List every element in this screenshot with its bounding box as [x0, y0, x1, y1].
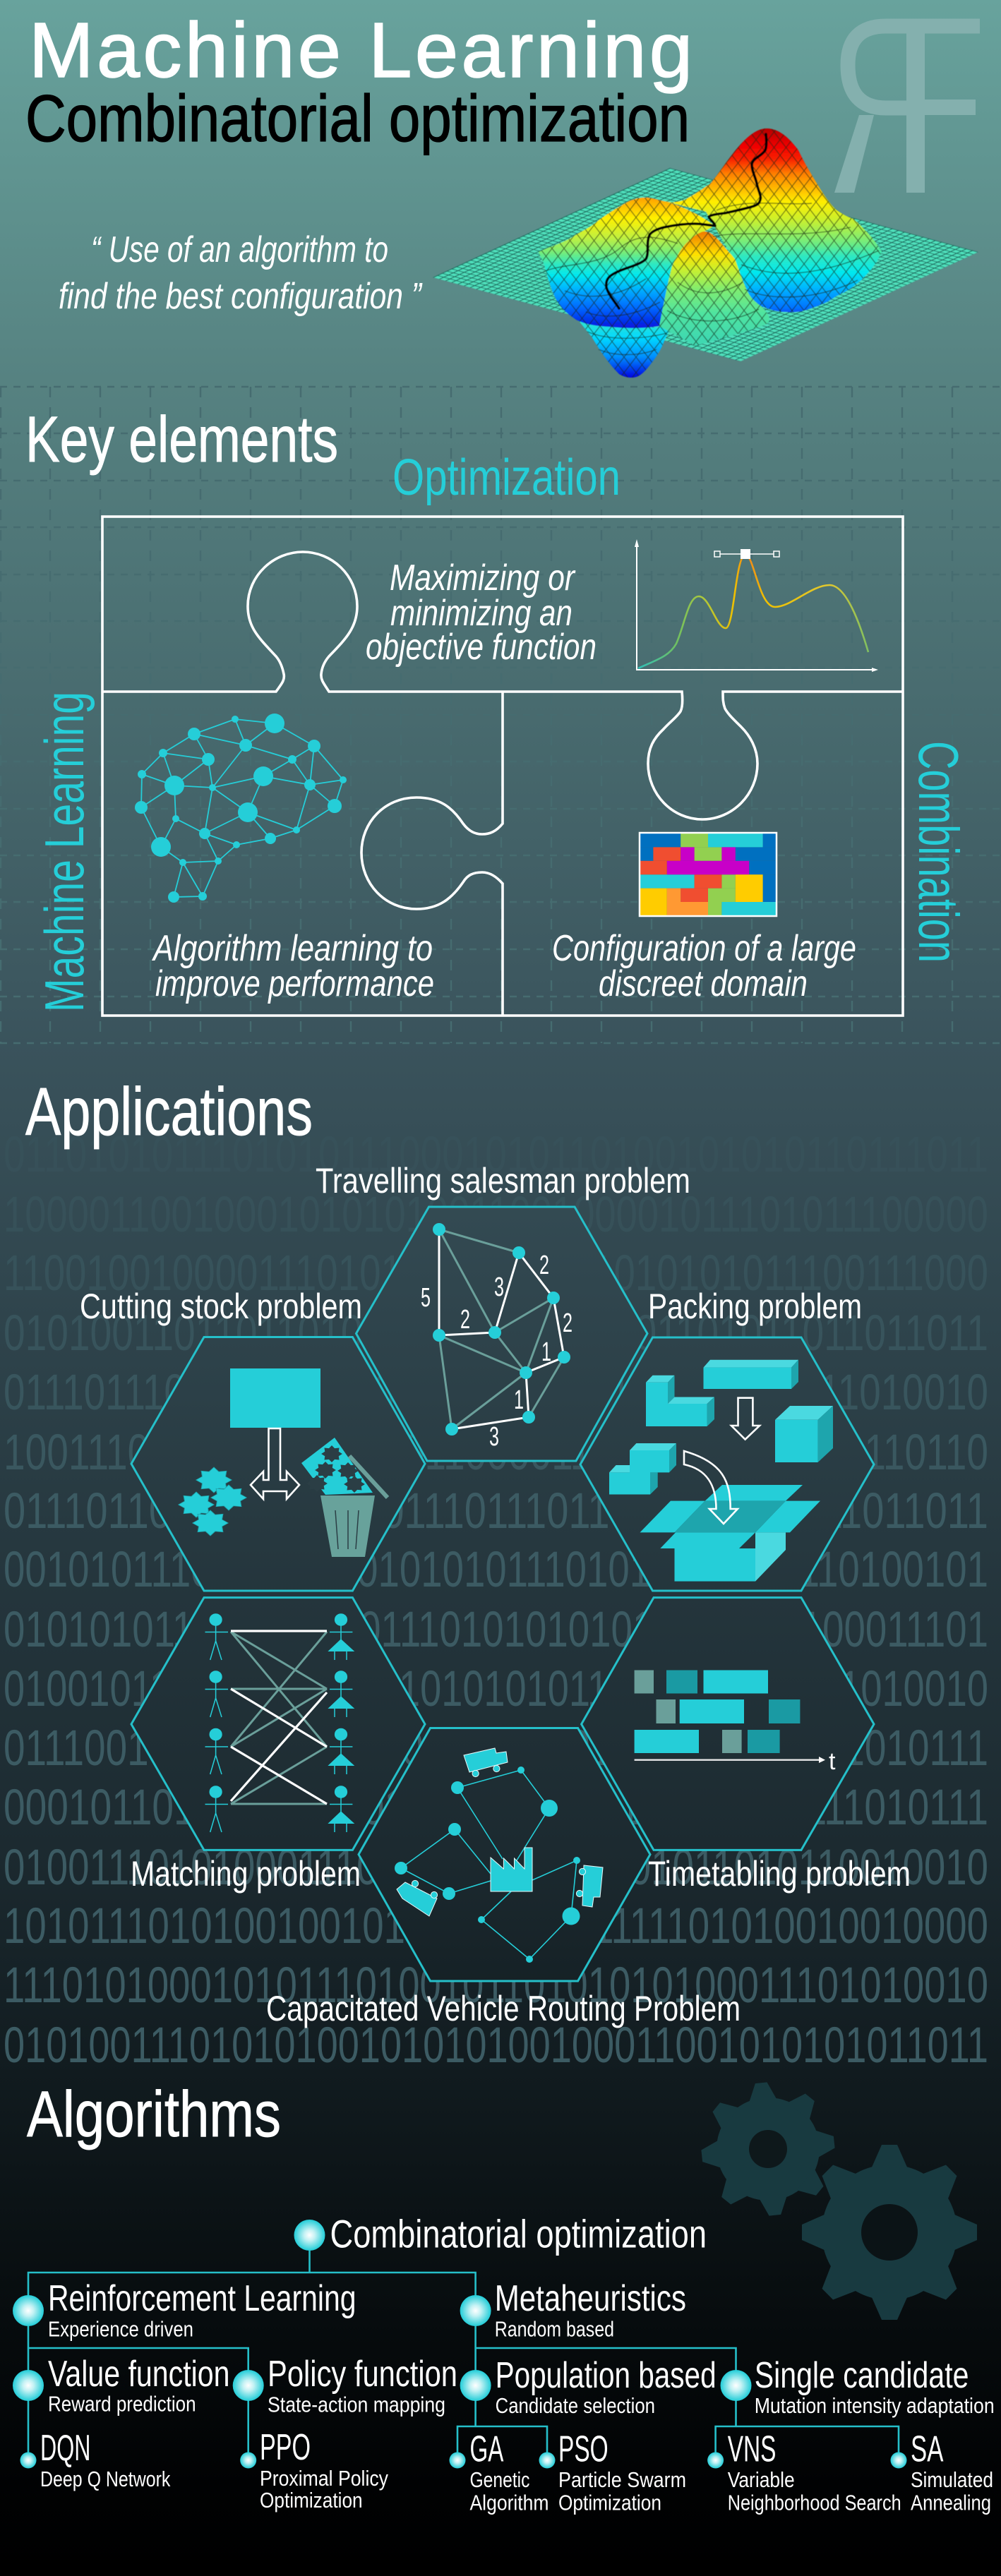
tree node: policy function: State-action mapping — [268, 2393, 445, 2417]
logo: RF monogram — [834, 26, 980, 193]
text: optimization definition — [366, 558, 597, 668]
section: applications — [25, 1074, 911, 2028]
label: optimization: Optimization — [392, 450, 621, 506]
text: combination definition — [552, 928, 856, 1004]
tree node: metaheuristics: Metaheuristics — [495, 2278, 686, 2319]
tree leaf: VNS: Variable — [728, 2467, 795, 2492]
graph: weighted tour: 3 — [489, 1422, 499, 1452]
tree leaf: VNS: Neighborhood Search — [728, 2490, 901, 2515]
tree leaf: GA — [449, 2429, 549, 2515]
label: machine learning: Machine Learning — [33, 692, 95, 1012]
tree node: single candidate — [720, 2355, 995, 2418]
icon: open box — [640, 1485, 820, 1582]
tree node: policy function — [233, 2354, 457, 2417]
panel: cutting stock problem — [131, 1337, 425, 1591]
label: cutting stock problem: Cutting stock problem — [80, 1287, 362, 1326]
tree node: value function — [13, 2354, 230, 2416]
binary digits backdrop — [4, 1127, 988, 2074]
icon: truck 1 — [464, 1748, 508, 1777]
jigsaw puzzle frame — [102, 517, 903, 1016]
text: optimization definition: minimizing an — [390, 593, 573, 634]
text: combination definition: discreet domain — [599, 963, 808, 1004]
arrow: curved into box — [684, 1451, 738, 1524]
tree leaf: PSO: Optimization — [558, 2490, 661, 2515]
tree leaf: DQN — [20, 2428, 171, 2491]
text: optimization definition: objective function — [366, 627, 597, 668]
panel: capacitated vehicle routing problem — [359, 1728, 650, 1981]
title: Machine Learning — [29, 7, 693, 94]
tree leaf: PPO: Optimization — [260, 2488, 363, 2512]
graph: delivery routes — [401, 1770, 577, 1959]
tree node: policy function: Policy function — [268, 2354, 457, 2395]
tree leaf: PPO — [240, 2427, 388, 2512]
quote — [59, 229, 423, 317]
tree node: reinforcement learning: Reinforcement Learning — [48, 2278, 356, 2319]
header — [25, 7, 980, 378]
tree leaf: GA: Algorithm — [470, 2490, 549, 2515]
icon: factory — [491, 1848, 532, 1891]
graph: weighted tour: 1 — [514, 1385, 524, 1415]
tree leaf: DQN: DQN — [40, 2428, 90, 2469]
icon: truck 2 — [397, 1880, 438, 1916]
icon: neural network brain — [135, 714, 347, 903]
heading: Algorithms — [27, 2078, 281, 2150]
tree leaf: VNS: VNS — [728, 2429, 777, 2470]
icon: small gear — [695, 2076, 841, 2222]
graph: bipartite matching lines — [231, 1631, 327, 1804]
icons: left figures — [205, 1614, 228, 1832]
icons: customer nodes — [395, 1767, 580, 1963]
tree leaf: PSO: PSO — [558, 2429, 609, 2470]
label: capacitated vehicle routing problem: Capacitated Vehicle Routing Problem — [266, 1989, 741, 2028]
icon: large gear — [802, 2145, 977, 2320]
text: machine learning definition: improve performance — [155, 963, 434, 1004]
icon: stock sheet — [230, 1368, 320, 1428]
tree leaf: VNS — [707, 2429, 901, 2515]
quote: find the best configuration ” — [59, 276, 423, 317]
panel: packing problem — [580, 1337, 874, 1591]
tree leaf: PSO — [539, 2429, 686, 2515]
label: travelling salesman problem: Travelling salesman problem — [316, 1161, 690, 1200]
graph: weighted tour: 5 — [421, 1283, 431, 1313]
text: optimization definition: Maximizing or — [390, 558, 576, 598]
tree leaf: SA: SA — [911, 2429, 944, 2470]
tree node: metaheuristics — [460, 2278, 686, 2342]
tree leaf: PSO: Particle Swarm — [558, 2467, 686, 2492]
heading: Key elements — [25, 404, 338, 476]
tree leaf: PPO: PPO — [260, 2427, 311, 2468]
icon: cut pieces — [179, 1467, 246, 1536]
label: combination: Combination — [907, 741, 970, 963]
graph: weighted tour: 2 — [539, 1251, 549, 1280]
section: algorithms — [13, 2076, 995, 2515]
text: machine learning definition — [152, 928, 434, 1004]
tree node: population based: Population based — [496, 2355, 717, 2396]
tree node: reinforcement learning: Experience driven — [48, 2316, 193, 2342]
chart: schedule blocks — [635, 1670, 836, 1775]
graph: weighted tour: 1 — [541, 1337, 551, 1367]
arrow: cut double arrow — [251, 1428, 299, 1499]
subtitle: Combinatorial optimization — [25, 81, 690, 155]
panel: matching problem — [131, 1598, 425, 1850]
text: machine learning definition: Algorithm learning to — [152, 928, 433, 969]
tree leaf: PPO: Proximal Policy — [260, 2466, 388, 2491]
graph: weighted tour: 2 — [460, 1305, 470, 1335]
text: combination definition: Configuration of a large — [552, 928, 856, 969]
icon: cube — [775, 1406, 833, 1462]
icon: L block — [646, 1376, 714, 1426]
chart: schedule blocks: t — [829, 1748, 836, 1775]
tree node: value function: Value function — [48, 2354, 230, 2395]
tree node: population based — [460, 2355, 717, 2418]
label: packing problem: Packing problem — [648, 1287, 862, 1326]
chart: 3D optimization surface — [433, 128, 978, 378]
tree leaf: GA: GA — [470, 2429, 504, 2470]
icons: right figures — [329, 1614, 354, 1832]
tree leaf: DQN: Deep Q Network — [40, 2467, 171, 2491]
quote: “ Use of an algorithm to — [91, 229, 388, 270]
tree node: reinforcement learning — [13, 2278, 356, 2342]
graph: weighted tour — [421, 1223, 573, 1452]
panel: timetabling problem — [582, 1598, 874, 1850]
heading: Applications — [25, 1074, 313, 1150]
icon: long box — [703, 1360, 798, 1389]
label: timetabling problem: Timetabling problem — [648, 1854, 911, 1894]
tree node: population based: Candidate selection — [496, 2393, 655, 2418]
tree node: metaheuristics: Random based — [495, 2316, 614, 2342]
tree leaf: SA — [891, 2429, 993, 2515]
label: matching problem: Matching problem — [131, 1854, 361, 1894]
icon: truck 3 — [576, 1865, 603, 1907]
arrow: down — [731, 1398, 760, 1440]
icon: waste sheet and bin — [301, 1438, 388, 1557]
icon: tetris combination grid — [640, 833, 777, 916]
graph: weighted tour: 3 — [494, 1272, 504, 1302]
icon: S block — [609, 1443, 676, 1495]
tree node: value function: Reward prediction — [48, 2392, 196, 2416]
graph: weighted tour: 2 — [563, 1308, 573, 1338]
section: key elements — [25, 404, 970, 1016]
tree leaf: GA: Genetic — [470, 2467, 529, 2492]
tree node: combinatorial optimization: Combinatorial optimization — [330, 2212, 707, 2256]
panel: travelling salesman problem — [356, 1207, 647, 1461]
chart: objective function curve — [635, 539, 878, 672]
tree: connector lines — [28, 2235, 899, 2460]
